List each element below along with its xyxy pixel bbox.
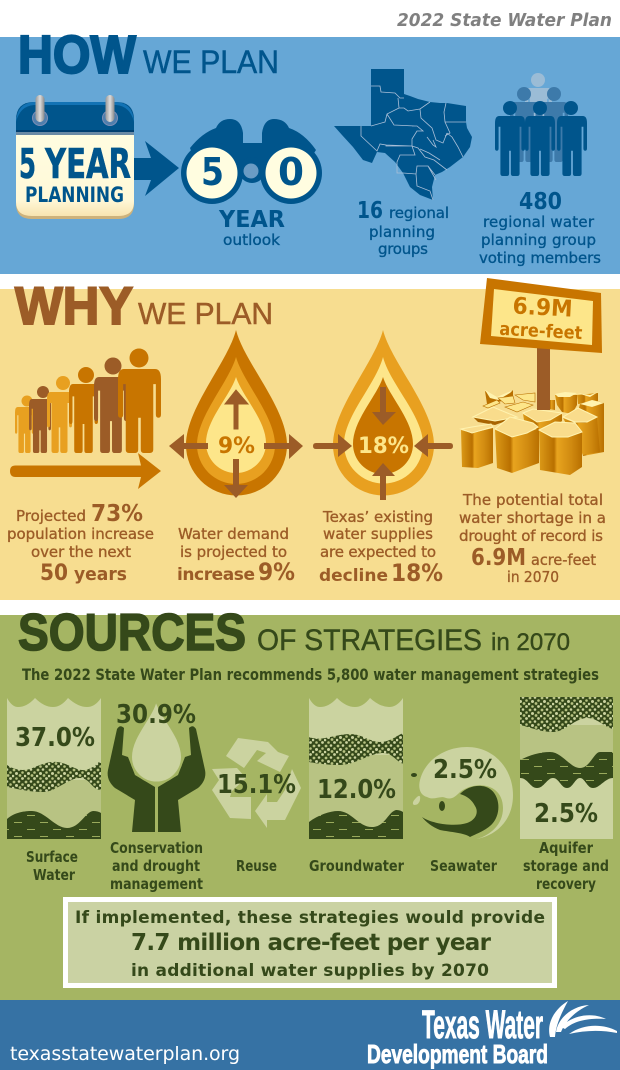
icon: water demand drop: 9%: [218, 434, 255, 459]
icon: water spray: [549, 1001, 617, 1037]
text: 480 voting members: planning group: [481, 231, 596, 249]
icon: calendar with 5 year planning: PLANNING: [25, 183, 124, 207]
text: water demand: increase: [177, 565, 255, 585]
text: surface water label: [26, 848, 78, 884]
page title: 2022 State Water Plan: [397, 10, 612, 31]
text: reuse label: Reuse: [236, 857, 277, 875]
icon: seawater wave: [410, 747, 513, 839]
icon: seawater wave: 2.5%: [433, 755, 497, 785]
icon: binoculars showing 50: [181, 119, 322, 204]
icon: water demand drop: [169, 330, 303, 498]
arrow: down: [224, 459, 248, 498]
text: 16 regional planning groups: regional: [389, 204, 449, 222]
heading: sources of strategies: OF STRATEGIES: [257, 624, 482, 657]
text: aquifer storage label: recovery: [536, 875, 596, 893]
front columns: [461, 417, 582, 475]
text: population increase: 50: [40, 561, 68, 586]
icon: groundwater cross-section: 12.0%: [317, 775, 396, 805]
arrow: right: [264, 434, 303, 459]
panel: why we plan: [0, 277, 620, 600]
text: water demand: is projected to: [180, 543, 287, 561]
callout: strategies total: If implemented, these strategies would provide: [75, 908, 545, 928]
text: population increase: 73%: [91, 501, 143, 527]
text: conservation label: and drought: [112, 857, 200, 875]
text: surface water label: Surface: [26, 848, 78, 866]
panel: how we plan: [0, 25, 620, 274]
logo: texas water development board: Development Board: [367, 1039, 548, 1069]
text: water supplies decline: water supplies: [323, 525, 433, 543]
text: water supplies decline: [319, 508, 443, 587]
icon: binoculars showing 50: 0: [278, 150, 304, 194]
icon: calendar with 5 year planning: 5: [19, 140, 36, 188]
icon: hands holding drop: [108, 700, 205, 832]
arrow: population growth: [10, 453, 161, 489]
text: potential water shortage: drought of record is: [459, 527, 603, 545]
arrow: inward from top: [372, 387, 396, 425]
icon: recycling arrows: [212, 738, 301, 828]
panel: sources of strategies: [0, 604, 620, 1000]
icon: aquifer storage cross-section: 2.5%: [534, 799, 598, 829]
callout: strategies total: in additional water supplies by 2070: [131, 961, 489, 981]
icon: surface water cross-section: [7, 698, 101, 839]
text: 50 year outlook: [218, 207, 285, 249]
sign: 6.9M acre-feet: 6.9M: [512, 293, 573, 323]
text: 480 voting members: [479, 189, 601, 267]
text: aquifer storage label: [523, 839, 609, 893]
panel: footer: [0, 1000, 620, 1070]
icon: binoculars showing 50: 5: [201, 150, 224, 194]
icon: calendar with 5 year planning: YEAR: [44, 140, 131, 188]
text: 50 year outlook: YEAR: [218, 207, 285, 233]
icon: water supply drop: [313, 330, 453, 500]
heading: sources of strategies: SOURCES: [18, 604, 246, 662]
text: conservation label: Conservation: [110, 839, 203, 857]
icon: growing population: [15, 348, 161, 453]
text: 16 regional planning groups: [357, 198, 449, 258]
text: potential water shortage: water shortage in a: [459, 509, 606, 527]
mid slabs: [473, 407, 600, 455]
text: seawater label: Seawater: [430, 857, 497, 875]
text: water supplies decline: are expected to: [320, 543, 436, 561]
callout: strategies total: 7.7 million acre-feet per year: [131, 930, 492, 956]
text: potential water shortage: acre-feet: [531, 551, 596, 569]
icon: sign post: [537, 348, 550, 410]
sign: 6.9M acre-feet: acre-feet: [499, 319, 583, 344]
icon: group of planning members: [495, 73, 587, 176]
logo: texas water development board: [367, 1001, 617, 1069]
icon: recycling arrows: 15.1%: [217, 770, 296, 800]
arrow: up: [225, 390, 248, 429]
text: 50 year outlook: outlook: [223, 231, 280, 249]
text: population increase: Projected: [16, 507, 86, 525]
text: population increase: population increase: [7, 525, 154, 543]
sign: 6.9M acre-feet: [480, 278, 602, 353]
text: water supplies decline: decline: [319, 566, 388, 586]
heading: why we plan: WHY: [15, 277, 133, 336]
arrow: inward from bottom: [372, 463, 395, 500]
text: potential water shortage: The potential total: [462, 491, 603, 509]
back slabs: [483, 390, 604, 456]
text: 480 voting members: regional water: [483, 213, 595, 231]
text: 480 voting members: 480: [519, 189, 562, 215]
icon: surface water cross-section: 37.0%: [15, 723, 95, 753]
text: water supplies decline: 18%: [391, 559, 443, 587]
heading: sources of strategies: [18, 604, 570, 662]
icon: hands holding drop: 30.9%: [116, 700, 196, 730]
heading: why we plan: WE PLAN: [138, 296, 273, 331]
heading: why we plan: [15, 277, 273, 336]
text: potential water shortage: in 2070: [507, 568, 559, 586]
arrow: five year plan to fifty year outlook: [134, 141, 179, 196]
text: water demand: Water demand: [178, 525, 289, 543]
heading: how we plan: [18, 25, 279, 85]
arrow: inward from right: [414, 434, 453, 457]
text: 16 regional planning groups: 16: [357, 198, 383, 224]
text: website: texasstatewaterplan.org: [10, 1043, 240, 1065]
text: conservation label: [110, 839, 203, 893]
text: 16 regional planning groups: groups: [378, 240, 428, 258]
heading: how we plan: HOW: [18, 25, 136, 85]
icon: cracked earth: [461, 390, 604, 475]
heading: sources of strategies: in 2070: [491, 629, 570, 656]
text: water demand: [177, 525, 295, 586]
text: population increase: over the next: [31, 543, 131, 561]
text: 16 regional planning groups: planning: [369, 223, 435, 241]
text: potential water shortage: [459, 491, 606, 586]
map: texas regional planning areas: [334, 69, 472, 200]
icon: water supply drop: 18%: [358, 434, 409, 459]
text: 480 voting members: voting members: [479, 249, 601, 267]
text: population increase: years: [74, 564, 127, 585]
icon: aquifer storage cross-section: [520, 697, 613, 839]
heading: how we plan: WE PLAN: [143, 44, 279, 80]
text: aquifer storage label: Aquifer: [539, 839, 594, 857]
arrow: left: [169, 434, 208, 459]
text: water demand: 9%: [258, 558, 295, 586]
arrow: inward from left: [313, 434, 352, 457]
text: conservation label: management: [110, 875, 203, 893]
callout: strategies total: [66, 900, 554, 986]
text: surface water label: Water: [33, 866, 75, 884]
icon: calendar with 5 year planning: [16, 95, 134, 219]
text: population increase: [7, 501, 154, 586]
text: water supplies decline: Texas’ existing: [322, 508, 433, 526]
text: potential water shortage: 6.9M: [471, 545, 526, 571]
icon: groundwater cross-section: [309, 698, 403, 839]
text: groundwater label: Groundwater: [309, 857, 405, 875]
